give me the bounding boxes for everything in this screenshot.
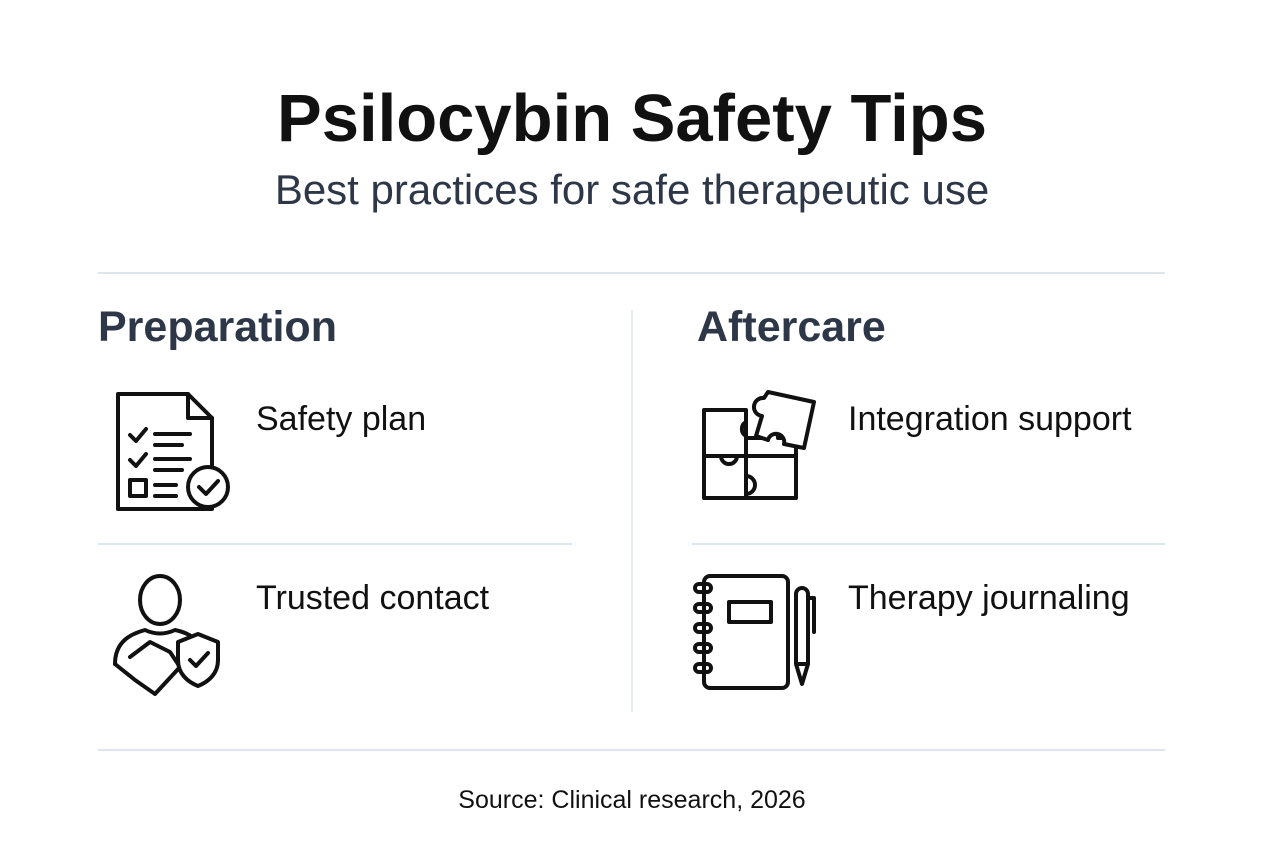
panel: preparation: [98, 303, 572, 696]
icon: puzzle: [702, 390, 816, 500]
heading: aftercare: Aftercare: [697, 303, 886, 351]
text: integration support: Integration support: [848, 400, 1132, 438]
heading: preparation: Preparation: [98, 303, 337, 351]
text: therapy journaling: Therapy journaling: [848, 579, 1130, 617]
title: Psilocybin Safety Tips: [277, 81, 987, 156]
subtitle: Best practices for safe therapeutic use: [275, 166, 989, 213]
text: safety plan: Safety plan: [256, 400, 426, 438]
icon: journal and pen: [693, 574, 816, 690]
icon: trusted contact: [112, 574, 220, 696]
icon: checklist document: [116, 392, 230, 511]
panel: aftercare: [692, 303, 1165, 690]
source note: Source: Clinical research, 2026: [458, 786, 806, 814]
text: trusted contact: Trusted contact: [256, 579, 489, 617]
